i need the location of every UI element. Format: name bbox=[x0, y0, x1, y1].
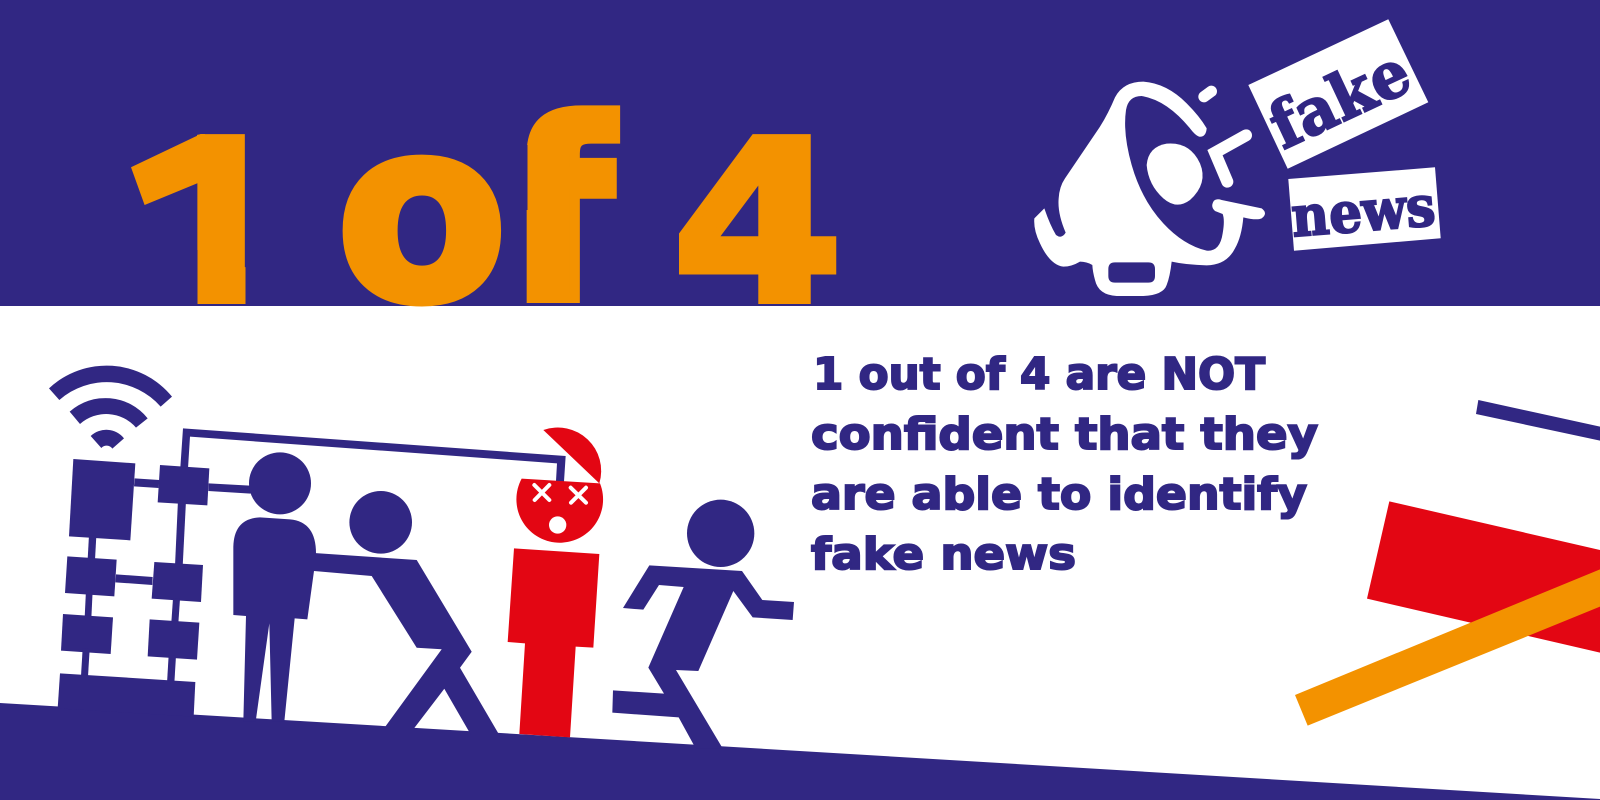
heading: 1 of 4: 1 bbox=[138, 95, 293, 353]
person 3: red figure with exploding head bbox=[508, 427, 603, 737]
ground slope bbox=[0, 703, 1600, 800]
icon: wifi signal bbox=[49, 366, 172, 449]
label: fake: fake bbox=[1258, 35, 1422, 164]
heading: 1 of 4: 4 bbox=[672, 95, 843, 353]
decorative bars bbox=[1295, 400, 1600, 726]
diagram: network blocks and screen frame bbox=[58, 428, 566, 717]
label: news: news bbox=[1289, 173, 1438, 250]
top banner background bbox=[0, 0, 1600, 306]
text block: statement: fake news bbox=[811, 529, 1076, 580]
text block: statement: 1 out of 4 are NOT bbox=[813, 349, 1265, 400]
person 1: standing bbox=[233, 452, 316, 722]
icon: megaphone bbox=[1034, 82, 1265, 296]
heading: 1 of 4 bbox=[120, 70, 843, 357]
text block: statement: confident that they bbox=[811, 409, 1318, 460]
heading: 1 of 4: of bbox=[337, 70, 616, 357]
text block: statement: are able to identify bbox=[811, 469, 1307, 520]
person 2: leaning bbox=[314, 491, 499, 735]
text block: statement bbox=[811, 349, 1318, 580]
person 4: running bbox=[612, 500, 794, 748]
